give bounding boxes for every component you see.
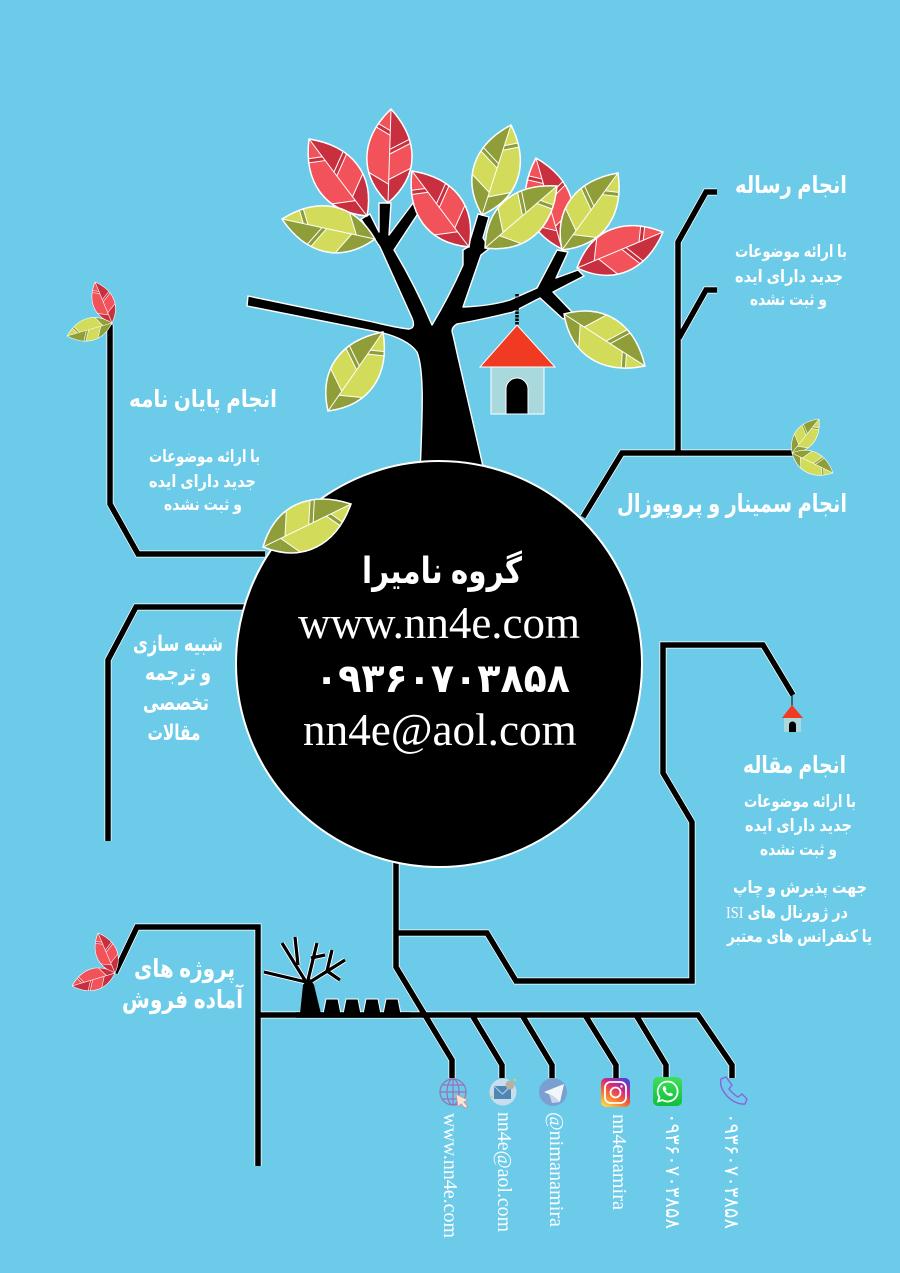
heading: dissertation: انجام رساله [735,172,847,199]
leaf: small red top left [80,275,127,330]
baseline under fence [296,1012,410,1018]
phone number: ۰۹۳۶۰۷۰۳۸۵۸ [315,656,570,702]
text: article description: جهت پذیرش و چاپ [733,878,867,898]
leaf: green front [461,159,581,275]
text: simulation and translation [133,631,223,745]
text: dissertation description: و ثبت نشده [750,290,827,310]
icon: telegram [539,1078,567,1106]
text: article description: و ثبت نشده [760,840,837,860]
text: projects for sale: پروژه های [134,955,235,984]
text: dissertation description: با ارائه موضوعات [735,242,847,262]
text: simulation and translation: مقالات [148,720,200,745]
small bare tree [264,937,345,1014]
small house icon [782,695,803,732]
text: article description [726,792,872,947]
text: projects for sale: آماده فروش [122,984,244,1015]
text: thesis description: و ثبت نشده [164,495,242,515]
text: simulation and translation: و ترجمه [145,660,211,686]
connector lines [108,192,794,1166]
text: dissertation description [735,242,847,310]
heading: article: انجام مقاله [743,752,846,779]
vertical label: website: www.nn4e.com [439,1113,461,1238]
heading: thesis: انجام پایان نامه [129,386,277,413]
text: dissertation description: جدید دارای ایده [735,267,843,286]
text: thesis description: جدید دارای ایده [149,472,256,491]
text: thesis description [149,447,260,515]
email: nn4e@aol.com [303,705,577,755]
leaf: green on circle [246,471,368,580]
text: projects for sale [122,955,244,1015]
icon: whatsapp [653,1077,682,1106]
tree silhouette [247,203,584,475]
text: simulation and translation: شبیه سازی [133,631,223,656]
vertical label: whatsapp number: ۰۹۳۶۰۷۰۳۸۵۸ [661,1113,683,1229]
vertical label: instagram: nn4enamira [608,1114,630,1210]
leaf: red top left [280,117,396,238]
vertical label: email: nn4e@aol.com [493,1112,515,1232]
leaf: green top [449,113,544,227]
leaf: small green top left [61,307,118,352]
icon: instagram [601,1078,630,1107]
fence teeth [323,999,401,1014]
text: article description: در ژورنال های ISI [726,903,848,923]
icon: phone [721,1077,747,1104]
leaf: green lower left [298,311,413,432]
vertical label: telegram: @nimanamira [545,1112,567,1227]
leaf: green lower right [544,284,665,396]
leaf: red middle [384,149,498,269]
leaf: small green right lower [784,438,841,488]
text: article description: جدید دارای ایده [745,816,852,835]
leaf: green left [273,185,384,273]
text: article description: با ارائه موضوعات [744,792,856,812]
central black circle [236,461,642,867]
center title: گروه نامیرا [362,550,522,592]
vertical label: phone number: ۰۹۳۶۰۷۰۳۸۵۸ [720,1113,742,1229]
text: thesis description: با ارائه موضوعات [149,447,260,467]
leaf: small red bottom left upper [83,926,130,980]
leaf: small red bottom left lower [66,957,121,1002]
hanging birdhouse [480,294,555,414]
leaf: small green right upper [779,409,832,463]
icon: globe with cursor [440,1079,468,1108]
icon: email [490,1078,516,1106]
leaf: red right [562,200,678,300]
leaf: red back [503,147,595,260]
website: www.nn4e.com [298,598,580,648]
leaf: red top [354,106,425,206]
text: simulation and translation: تخصصی [143,690,209,715]
leaf: green right [533,151,647,272]
